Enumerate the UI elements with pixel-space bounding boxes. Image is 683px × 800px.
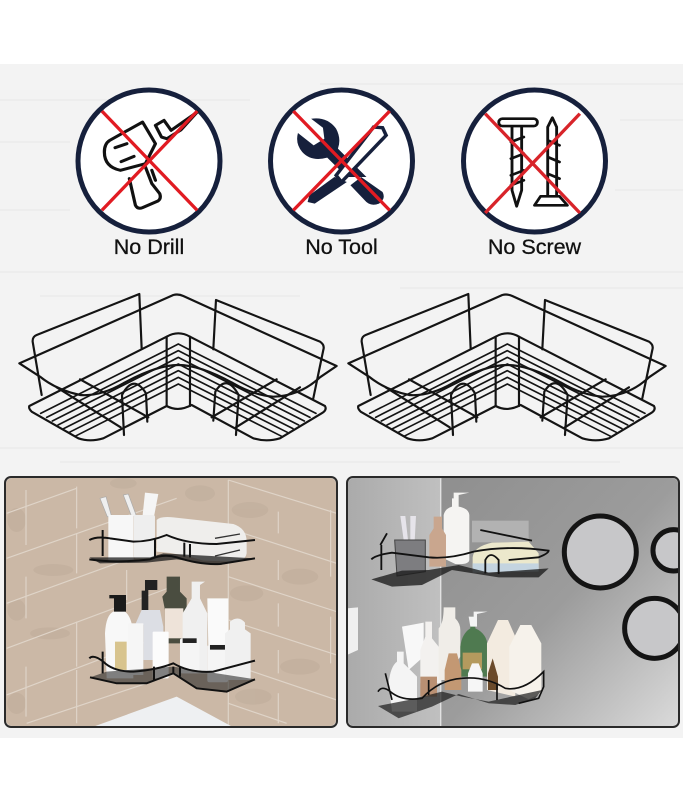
icon: no screw: [464, 90, 606, 232]
tile mottling: [7, 478, 320, 714]
wire rack: right: [348, 294, 666, 440]
upper shelf items: [89, 493, 255, 565]
label: no screw: No Screw: [488, 235, 582, 259]
round mirrors: [564, 516, 683, 658]
label: no drill: No Drill: [114, 235, 184, 259]
icon: no drill: [78, 90, 220, 232]
drill glyph: [104, 112, 197, 208]
label: no tool: No Tool: [305, 235, 378, 259]
lower shelf items: [89, 577, 255, 693]
red cross: [293, 111, 390, 210]
red cross: [102, 111, 197, 210]
red cross: [485, 114, 580, 213]
wrench and screwdriver glyph: [297, 118, 386, 205]
lower shelf items: [378, 607, 544, 718]
icon: no tool: [270, 90, 412, 232]
panel: tiled wall photo: [3, 477, 340, 730]
wall outlet: [347, 607, 358, 655]
wire rack: left: [19, 294, 337, 440]
bathtub edge: [92, 697, 233, 727]
upper shelf items: [371, 493, 549, 587]
screws glyph: [499, 118, 567, 206]
panel: grey wall photo: [345, 477, 683, 730]
tile joints: [7, 480, 337, 727]
